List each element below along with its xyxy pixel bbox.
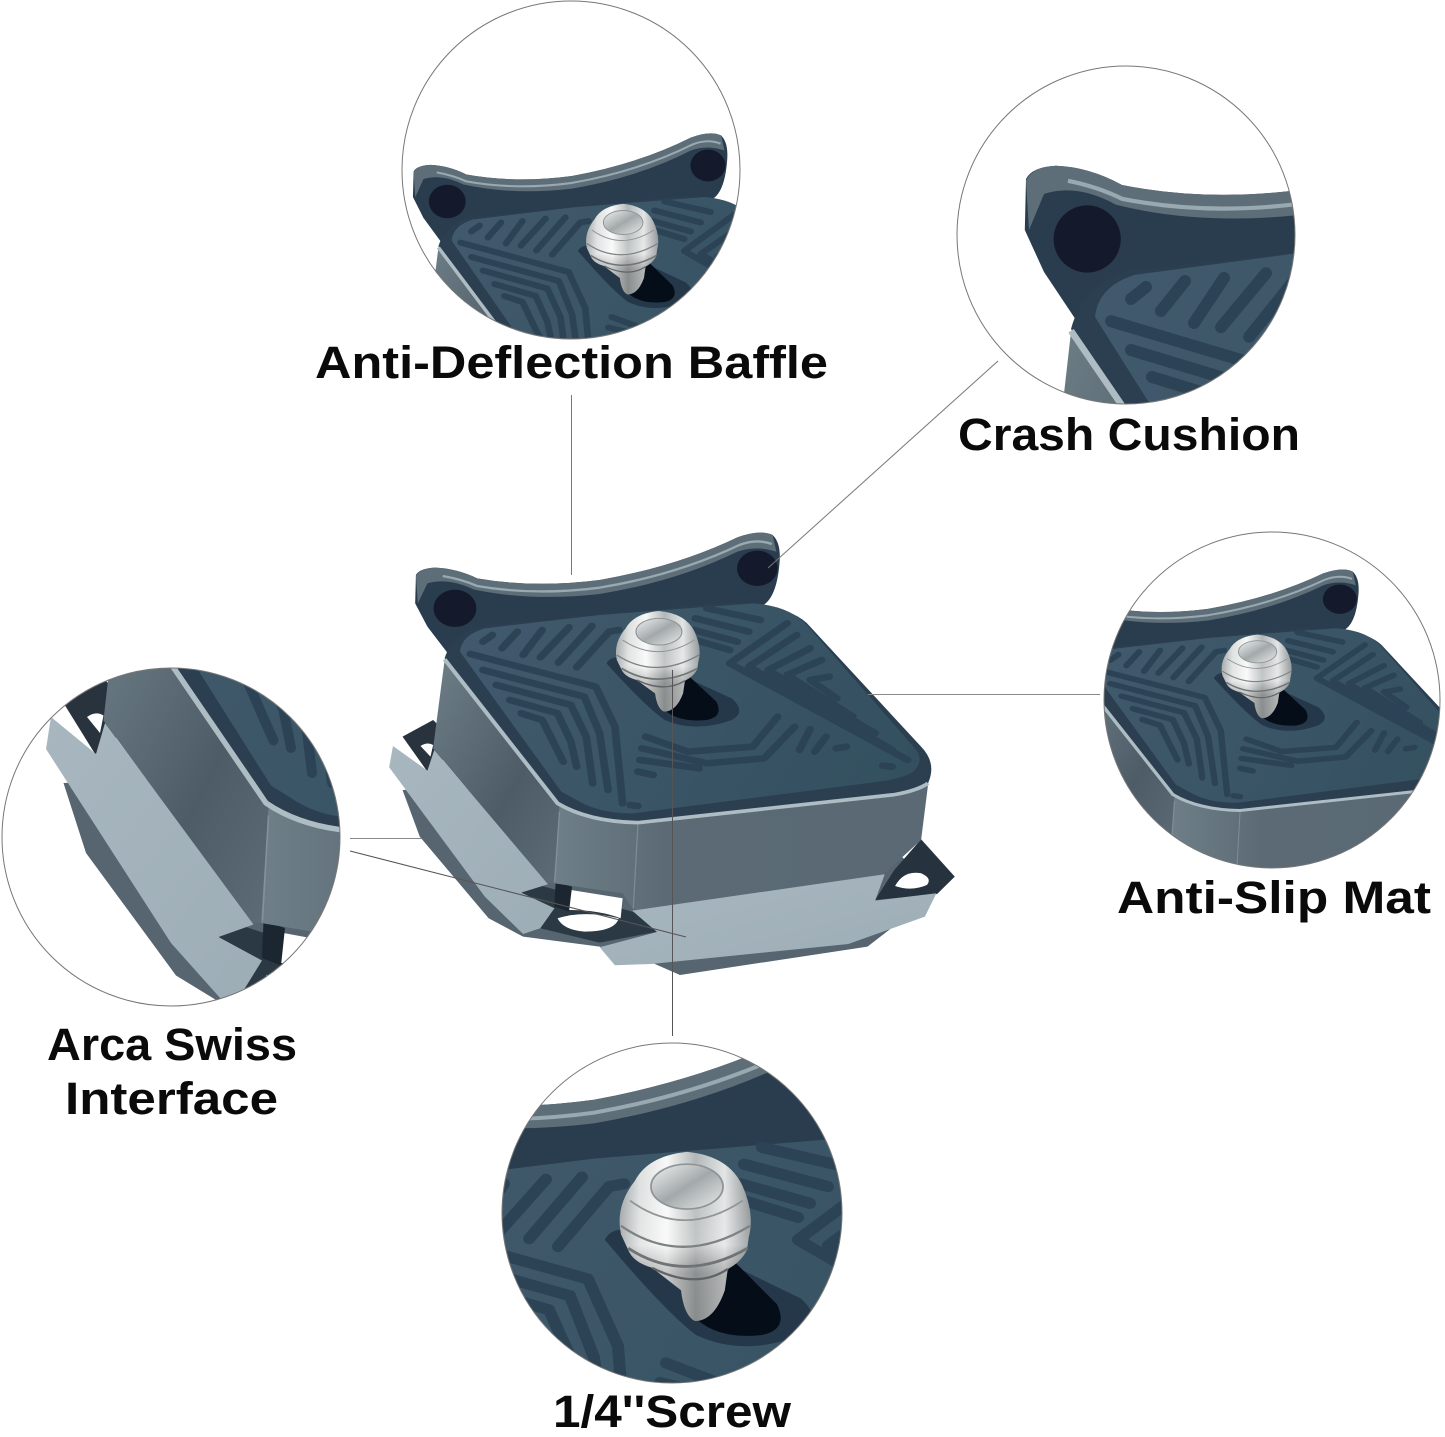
leader line: anti-deflection baffle	[570, 395, 572, 575]
label: anti-deflection baffle: Anti-Deflection Baffle	[315, 337, 828, 388]
leader line: arca swiss upper	[350, 838, 422, 840]
label: crash cushion: Crash Cushion	[958, 409, 1300, 460]
panel: 1/4 inch screw detail	[502, 1042, 842, 1384]
leader line: crash cushion	[768, 361, 998, 568]
panel: arca swiss interface detail	[2, 668, 340, 1006]
panel: anti-slip mat detail	[1104, 532, 1440, 868]
leader line: anti-slip mat	[868, 694, 1100, 696]
main product: quick release plate	[389, 533, 955, 975]
label: arca swiss interface: Interface	[65, 1073, 278, 1124]
panel: anti-deflection baffle detail	[402, 0, 740, 340]
label: anti-slip mat: Anti-Slip Mat	[1117, 872, 1431, 923]
panel: crash cushion detail	[956, 66, 1296, 404]
label: arca swiss interface: Arca Swiss	[47, 1019, 297, 1070]
label: arca swiss interface	[47, 1019, 297, 1124]
label: 1/4 inch screw: 1/4''Screw	[553, 1386, 792, 1437]
leader line: 1/4 screw	[672, 670, 674, 1036]
leader line: arca swiss lower	[350, 851, 686, 937]
